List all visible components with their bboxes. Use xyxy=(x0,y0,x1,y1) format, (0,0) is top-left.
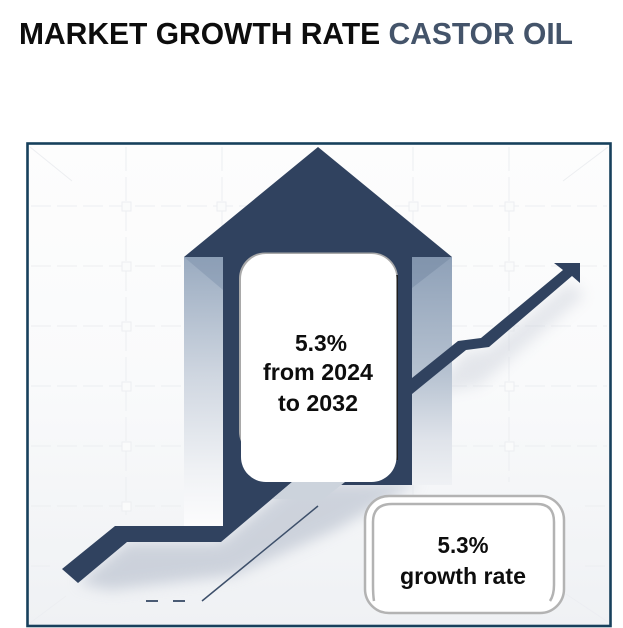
card: 5.3% from 2024 to 2032: from 2024 xyxy=(263,359,373,385)
card: 5.3% growth rate: 5.3% xyxy=(438,532,488,558)
arrow body xyxy=(62,147,452,583)
dashes xyxy=(146,600,185,602)
card: 5.3% growth rate xyxy=(365,496,564,613)
icon: up arrow house xyxy=(62,147,452,583)
shadow under trend line xyxy=(78,282,585,590)
card: 5.3% from 2024 to 2032 xyxy=(239,252,398,482)
right trend line with arrowhead xyxy=(412,263,580,394)
panel: chart frame xyxy=(28,144,610,626)
card: 5.3% from 2024 to 2032: 5.3% xyxy=(295,330,347,356)
arrow facet shading right xyxy=(412,257,452,288)
card: 5.3% from 2024 to 2032: to 2032 xyxy=(278,390,358,416)
card: 5.3% growth rate: growth rate xyxy=(400,563,526,589)
arrow side panel right xyxy=(412,257,452,485)
title: MARKET GROWTH RATE CASTOR OIL xyxy=(19,16,573,51)
arrow facet shading xyxy=(184,257,223,290)
shaded gap beneath card xyxy=(272,482,345,500)
arrow side panel left xyxy=(184,257,223,526)
thin accent line xyxy=(202,506,318,601)
